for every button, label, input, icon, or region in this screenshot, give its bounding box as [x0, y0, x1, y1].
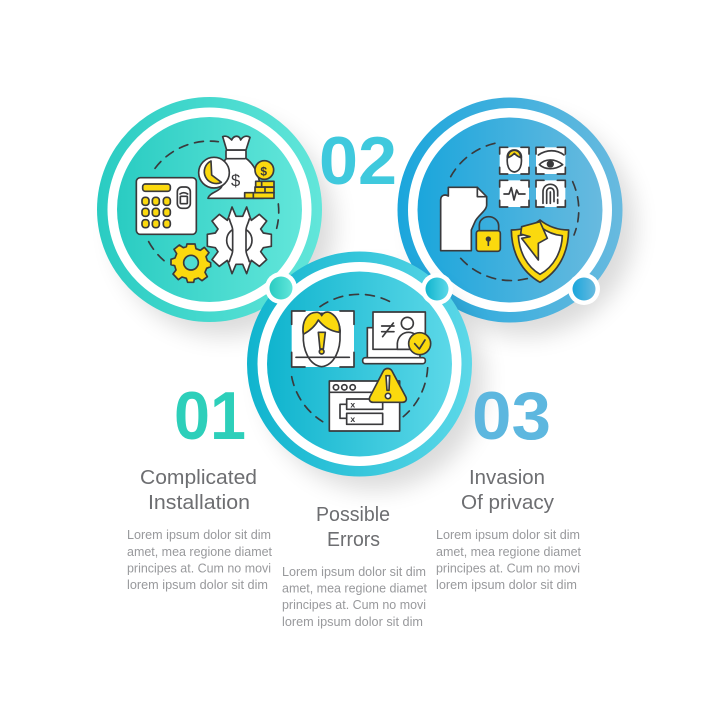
- icon: keypad, money bag and gears: [136, 136, 279, 282]
- connector dot right: [568, 273, 600, 305]
- heading: possible errors: Errors: [327, 529, 380, 551]
- number 03: 03: [472, 378, 551, 454]
- text block: column 2: lorem ipsum dolor sit dim: [282, 615, 423, 629]
- heading: complicated installation: Complicated: [140, 467, 257, 489]
- heading: complicated installation: [140, 467, 257, 514]
- heading: invasion of privacy: Invasion: [469, 467, 545, 489]
- panel: circle 2 privacy: [398, 98, 635, 336]
- number 01: 01: [174, 378, 246, 454]
- text block: column 1: principes at. Cum no movi: [127, 562, 271, 576]
- text block: column 2: principes at. Cum no movi: [282, 598, 426, 612]
- heading: invasion of privacy: Of privacy: [461, 492, 554, 514]
- icon: keypad, money bag and gears: $: [260, 164, 267, 178]
- heading: possible errors: [316, 504, 390, 551]
- panel: circle 1 installation: [97, 97, 334, 336]
- icon: keypad, money bag and gears: $: [231, 171, 240, 190]
- connector dot left: [265, 272, 297, 304]
- text block: column 3: lorem ipsum dolor sit dim: [436, 578, 577, 592]
- text block: column 2: amet, mea regione diamet: [282, 582, 428, 596]
- text block: column 3: amet, mea regione diamet: [436, 545, 582, 559]
- connector dot centre: [421, 273, 453, 305]
- text block: column 3: principes at. Cum no movi: [436, 562, 580, 576]
- text block: column 1: lorem ipsum dolor sit dim: [127, 578, 268, 592]
- icon: face, laptop and warning window: x: [350, 399, 355, 409]
- panel: circle 3 errors: [247, 252, 484, 490]
- icon: yellow gear: [171, 244, 211, 282]
- icon: white gear with wrench: [207, 207, 271, 274]
- heading: invasion of privacy: [461, 467, 554, 514]
- text block: column 1: amet, mea regione diamet: [127, 545, 273, 559]
- text block: column 3: Lorem ipsum dolor sit dim: [436, 528, 580, 542]
- text block: column 2: [282, 565, 428, 629]
- heading: possible errors: Possible: [316, 504, 390, 526]
- icon: biometric frames, folder and shield: [441, 143, 579, 282]
- text block: column 1: [127, 528, 273, 592]
- icon: face, laptop and warning window: x: [350, 414, 355, 424]
- text block: column 3: [436, 528, 582, 592]
- number 02: 02: [319, 123, 397, 199]
- text block: column 2: Lorem ipsum dolor sit dim: [282, 565, 426, 579]
- heading: complicated installation: Installation: [148, 492, 250, 514]
- text block: column 1: Lorem ipsum dolor sit dim: [127, 528, 271, 542]
- icon: face, laptop and warning window: [292, 294, 431, 431]
